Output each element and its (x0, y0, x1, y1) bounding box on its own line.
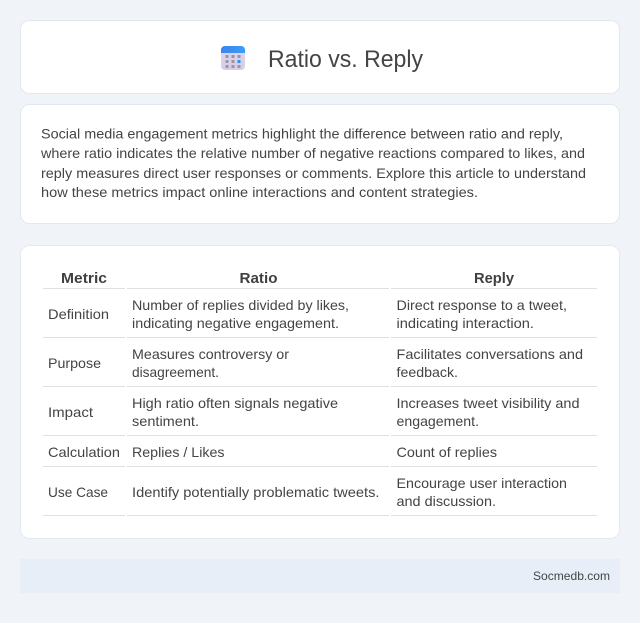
row: purpose: disagreement. (132, 364, 219, 380)
row: purpose (43, 346, 597, 386)
row: calculation: Count of replies (396, 444, 497, 460)
panel: title card (20, 20, 620, 94)
row: impact: Increases tweet visibility and (396, 395, 580, 411)
row: purpose: Facilitates conversations and (396, 346, 583, 362)
row: definition: Direct response to a tweet, (396, 297, 567, 313)
panel: introduction (20, 104, 620, 224)
table header: Reply (474, 270, 515, 287)
footer bar (20, 559, 620, 593)
row: use case: Encourage user interaction (396, 475, 567, 491)
text block: introduction: reply measures direct user responses or comments. Explore this article to understand (41, 165, 586, 181)
text block: introduction (40, 126, 586, 200)
table header: Ratio (240, 270, 278, 287)
row: use case: and discussion. (396, 493, 496, 509)
row: impact: sentiment. (132, 413, 199, 429)
row: definition (43, 297, 597, 338)
row: definition: indicating negative engagement. (132, 315, 339, 331)
row: impact: engagement. (396, 413, 479, 429)
table header (43, 270, 597, 288)
row: calculation: Calculation (48, 444, 120, 460)
row: purpose: Purpose (48, 355, 101, 371)
title: Ratio vs. Reply (268, 46, 423, 73)
row: purpose: feedback. (396, 364, 458, 380)
text block: introduction: how these metrics impact online interactions and content strategies. (41, 184, 478, 200)
text block: introduction: Social media engagement metrics highlight the difference between ratio and reply, (41, 126, 563, 142)
row: calculation: Replies / Likes (132, 444, 224, 460)
row: use case: Identify potentially problematic tweets. (132, 484, 380, 500)
row: definition: indicating interaction. (396, 315, 534, 331)
icon: calendar (221, 46, 245, 70)
row: calculation (43, 444, 597, 466)
row: purpose: Measures controversy or (132, 346, 289, 362)
panel: comparison table (20, 246, 620, 538)
row: impact: High ratio often signals negative (132, 395, 338, 411)
row: use case (43, 475, 597, 516)
table header: Metric (61, 270, 107, 287)
text block: introduction: where ratio indicates the relative number of negative reactions compared to likes, and (40, 145, 585, 161)
row: use case: Use Case (48, 484, 108, 500)
row: definition: Number of replies divided by likes, (132, 297, 349, 313)
row: impact: Impact (48, 404, 93, 420)
footer text: Socmedb.com (533, 569, 610, 583)
row: impact (43, 395, 597, 436)
row: definition: Definition (48, 306, 109, 322)
